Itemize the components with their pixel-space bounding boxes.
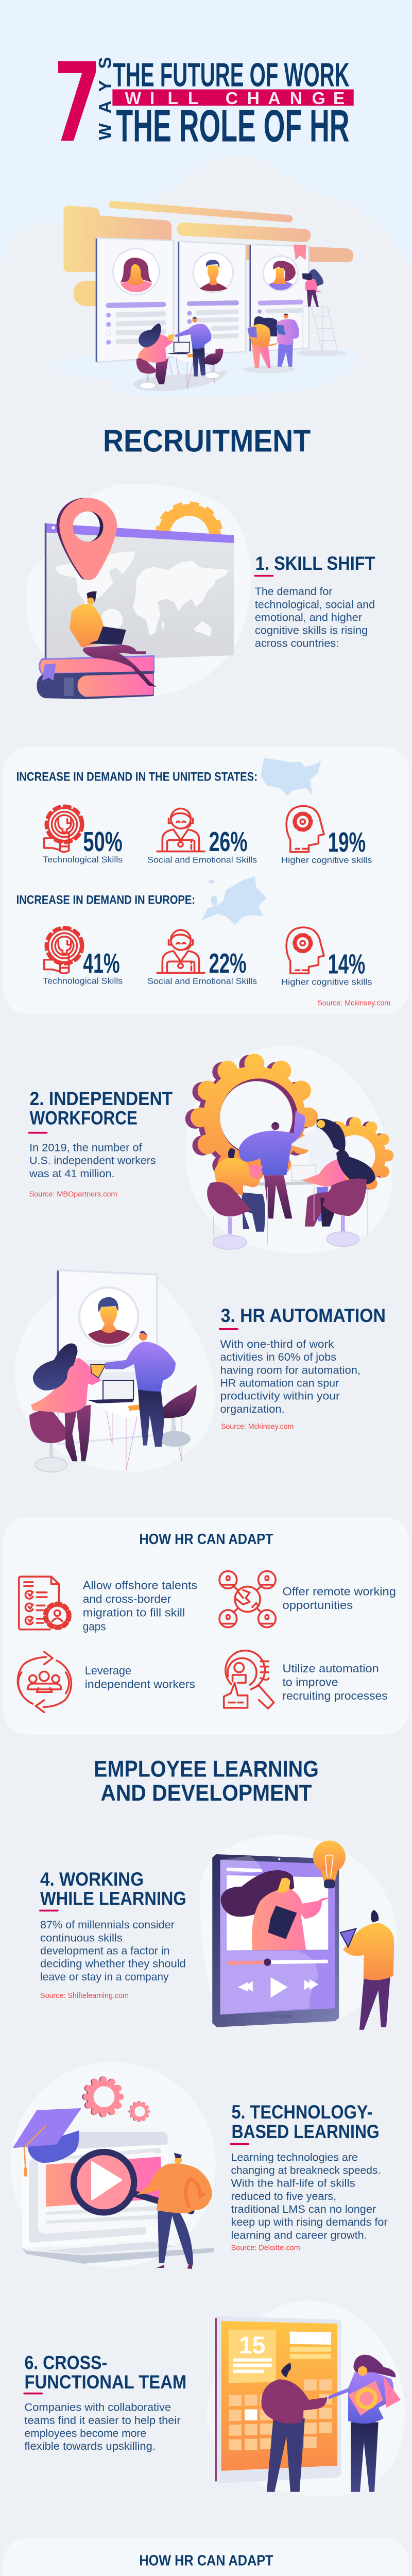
text: utilize automation <box>282 1662 388 1702</box>
hr automation heading: 3. HR AUTOMATION <box>221 1305 386 1326</box>
icon: cycle of people <box>18 1652 71 1712</box>
laptop on table <box>291 1165 316 1180</box>
hero illustration <box>48 205 355 396</box>
man with tablet <box>340 1910 394 2030</box>
text: independent workforce <box>28 1088 173 1198</box>
independent workforce body: was at 41 million. <box>29 1168 114 1180</box>
light bulb <box>313 1840 346 1888</box>
underline four <box>39 1910 59 1911</box>
illustration: skill shift <box>26 484 251 699</box>
stat: 19 percent: 19% <box>328 827 366 858</box>
sky background <box>0 0 412 289</box>
cross functional team body: Companies with collaborative <box>24 2402 171 2414</box>
technology based learning heading: 5. TECHNOLOGY- <box>231 2102 372 2123</box>
icon: checklist gear <box>19 1577 70 1630</box>
cross functional team heading: 6. CROSS- <box>24 2352 107 2373</box>
heading: employee learning and development: AND DEVELOPMENT <box>100 1780 312 1806</box>
skill shift heading: 1. SKILL SHIFT <box>255 553 375 574</box>
heading: how hr can adapt one: HOW HR CAN ADAPT <box>139 1531 273 1548</box>
blob three <box>14 1281 215 1472</box>
icon: agent <box>157 808 204 852</box>
title <box>58 56 354 151</box>
small gear <box>314 1117 393 1194</box>
hr automation body: productivity within your <box>220 1390 340 1402</box>
background hills <box>0 155 412 289</box>
heading: recruitment: RECRUITMENT <box>103 423 311 459</box>
text: allow offshore: migration to fill skill <box>83 1606 185 1619</box>
independent workforce heading: WORKFORCE <box>30 1108 138 1129</box>
white blob <box>26 484 251 697</box>
cross functional team body: teams find it easier to help their <box>24 2415 181 2427</box>
text: skill shift <box>254 553 375 650</box>
cross functional team body: flexible towards upskilling. <box>24 2441 156 2452</box>
stat: 50 percent: 50% <box>83 827 123 857</box>
working while learning heading: 4. WORKING <box>40 1869 144 1890</box>
stats row: united states <box>43 806 372 865</box>
woman <box>31 1343 106 1461</box>
ground blob <box>48 347 355 396</box>
cross functional team body: employees become more <box>24 2428 146 2439</box>
blob five <box>10 2062 216 2267</box>
technology based learning heading <box>231 2102 380 2142</box>
icon: head gear <box>286 806 324 852</box>
source: mckinsey three: Source: Mckinsey.com <box>221 1422 294 1431</box>
text: utilize automation: recruiting processes <box>282 1689 388 1702</box>
illustration: technology based learning <box>10 2062 216 2269</box>
working while learning body <box>40 1919 186 1983</box>
cross functional team body <box>24 2402 181 2452</box>
stat: 22 percent: 22% <box>209 948 247 979</box>
heading: employee learning and development: EMPLOYEE LEARNING <box>94 1755 319 1782</box>
title: will change: WILL CHANGE <box>125 89 345 108</box>
text: utilize automation: to improve <box>282 1675 338 1688</box>
illustration: hr automation <box>14 1270 215 1472</box>
location pin <box>57 498 117 580</box>
technology based learning body: learning and career growth. <box>231 2229 367 2241</box>
profile card <box>58 1270 157 1444</box>
candidate card two <box>179 241 246 355</box>
source: mckinsey: Source: Mckinsey.com <box>317 999 390 1008</box>
man at calendar <box>261 2363 327 2492</box>
stats row: europe <box>43 927 372 987</box>
underline five <box>230 2143 249 2145</box>
skill shift body: The demand for <box>255 586 332 598</box>
skill shift body: cognitive skills is rising <box>255 625 368 637</box>
working while learning heading <box>40 1869 186 1909</box>
text: offer remote <box>282 1585 396 1612</box>
woman with chart <box>329 2355 401 2492</box>
big gear <box>185 1054 318 1182</box>
books <box>37 656 153 699</box>
text: leverage <box>85 1664 195 1691</box>
independent workforce heading: 2. INDEPENDENT <box>30 1088 173 1109</box>
calendar tablet: 15 <box>239 2332 265 2359</box>
table and laptop <box>87 1381 183 1470</box>
seated woman right <box>302 1150 375 1246</box>
stat: 14 percent: 14% <box>328 949 365 979</box>
label: higher cognitive skills: Higher cognitive skills <box>281 855 372 865</box>
stat: 41 percent: 41% <box>83 948 120 979</box>
text: leverage: Leverage <box>85 1664 131 1677</box>
page background <box>0 0 412 1741</box>
map: europe <box>202 876 267 925</box>
folder shapes <box>63 205 353 306</box>
icon: technology <box>44 806 83 852</box>
ladder with woman <box>296 269 346 356</box>
skill shift body: technological, social and <box>255 599 375 611</box>
text: offer remote: Offer remote working <box>282 1585 396 1598</box>
underline three <box>219 1328 238 1330</box>
browser window <box>45 523 234 662</box>
icon: recruiting search <box>224 1651 274 1708</box>
laptop <box>22 2132 214 2264</box>
stat: 26 percent: 26% <box>209 827 248 857</box>
man with laptop <box>70 591 157 687</box>
blob four <box>200 1835 397 2025</box>
heading: united states demand: INCREASE IN DEMAND IN THE UNITED STATES: <box>16 770 258 784</box>
label: social and emotional skills: Social and Emotional Skills <box>147 855 257 865</box>
title: big seven <box>58 61 96 141</box>
hr automation body <box>220 1338 360 1415</box>
illustration: team and gears <box>185 1046 393 1253</box>
technology based learning body: keep up with rising demands for <box>231 2216 388 2228</box>
source: mbo partners: Source: MBOpartners.com <box>29 1190 117 1198</box>
hr automation body: having room for automation, <box>220 1364 360 1376</box>
text: utilize automation: Utilize automation <box>282 1662 379 1675</box>
hr automation body: organization. <box>220 1403 285 1415</box>
pink gears <box>82 2076 150 2122</box>
candidate card one <box>96 238 174 362</box>
table top <box>213 1182 368 1185</box>
seated man left <box>207 1148 267 1249</box>
world map <box>56 551 229 637</box>
technology based learning body: traditional LMS can no longer <box>231 2204 376 2215</box>
woman on screen <box>221 1870 332 1950</box>
heading: how hr can adapt two: HOW HR CAN ADAPT <box>139 2553 273 2569</box>
man standing <box>105 1331 197 1447</box>
text: allow offshore: and cross-border <box>83 1592 171 1605</box>
panel: how hr can adapt one <box>3 1517 409 1735</box>
text: allow offshore: Allow offshore talents <box>83 1579 197 1592</box>
panel: increase in demand <box>3 747 409 1014</box>
working while learning body: continuous skills <box>40 1932 123 1944</box>
technology based learning body: Learning technologies are <box>231 2151 358 2163</box>
working while learning body: deciding whether they should <box>40 1958 186 1970</box>
candidate card three <box>250 244 308 352</box>
icon: head gear europe <box>286 927 324 973</box>
people at table <box>133 317 226 391</box>
working while learning body: 87% of millennials consider <box>40 1919 175 1931</box>
label: technological skills europe: Technological Skills <box>43 976 123 986</box>
label: higher cognitive europe: Higher cognitive skills <box>281 977 372 987</box>
skill shift body: across countries: <box>255 638 339 650</box>
icon: agent europe <box>157 930 204 973</box>
cross functional team heading: FUNCTIONAL TEAM <box>24 2371 186 2393</box>
technology based learning body: reduced to five years, <box>231 2191 336 2202</box>
icon: global network <box>219 1571 276 1628</box>
illustration: working while learning <box>200 1835 397 2030</box>
panel: how hr can adapt two <box>3 2538 409 2576</box>
text: allow offshore <box>83 1579 197 1633</box>
man in purple <box>239 1111 305 1218</box>
blob two <box>185 1046 392 1253</box>
working while learning body: development as a factor in <box>40 1945 170 1957</box>
text: cross functional team <box>23 2352 186 2452</box>
technology based learning body: With the half-life of skills <box>231 2177 355 2189</box>
icon: technology europe <box>44 927 83 973</box>
title: rotated ways: WAYS <box>95 57 115 140</box>
chair left <box>29 1411 71 1472</box>
independent workforce body <box>29 1142 156 1180</box>
video controls <box>229 1959 327 1998</box>
heading: employee learning and development <box>94 1755 319 1806</box>
text: technology based learning <box>230 2102 388 2252</box>
title: pink band <box>112 89 354 106</box>
heading: europe demand: INCREASE IN DEMAND IN EUROPE: <box>16 893 195 907</box>
skill shift body <box>255 586 375 650</box>
man with magnifier <box>136 2153 212 2269</box>
technology based learning body <box>231 2151 388 2241</box>
text: offer remote: opportunities <box>282 1599 353 1612</box>
standing pair <box>244 314 299 373</box>
illustration: cross functional team <box>207 2300 405 2496</box>
independent workforce body: In 2019, the number of <box>29 1142 142 1154</box>
hr automation body: activities in 60% of jobs <box>220 1351 336 1363</box>
woman in white <box>290 1119 346 1221</box>
source: deloitte: Source: Deloitte.com <box>231 2244 300 2252</box>
skill shift body: emotional, and higher <box>255 612 362 624</box>
cross functional team heading <box>24 2352 186 2393</box>
text: hr automation <box>219 1305 386 1431</box>
blob six <box>207 2300 405 2496</box>
label: technological skills: Technological Skills <box>43 855 123 865</box>
underline two <box>28 1132 47 1134</box>
text: working while learning <box>39 1869 186 2000</box>
calendar tablet <box>215 2316 341 2483</box>
hr automation body: With one-third of work <box>220 1338 334 1350</box>
independent workforce body: U.S. independent workers <box>29 1155 156 1167</box>
hr automation body: HR automation can spur <box>220 1377 339 1389</box>
technology based learning heading: BASED LEARNING <box>231 2121 380 2142</box>
tablet <box>212 1854 339 2027</box>
source: shift elearning: Source: Shiftelearning.com <box>40 1992 129 2000</box>
map: united states <box>261 758 321 796</box>
underline <box>254 575 273 577</box>
text: leverage: independent workers <box>85 1678 195 1691</box>
independent workforce heading <box>30 1088 173 1129</box>
working while learning heading: WHILE LEARNING <box>40 1888 186 1909</box>
technology based learning body: changing at breakneck speeds. <box>231 2164 381 2176</box>
text: allow offshore: gaps <box>83 1620 106 1633</box>
gear <box>158 505 220 567</box>
magnifier <box>74 2152 191 2212</box>
label: social and emotional europe: Social and Emotional Skills <box>147 976 257 986</box>
underline six <box>23 2393 43 2394</box>
working while learning body: leave or stay in a company <box>40 1971 169 1983</box>
graduation cap <box>12 2108 81 2176</box>
